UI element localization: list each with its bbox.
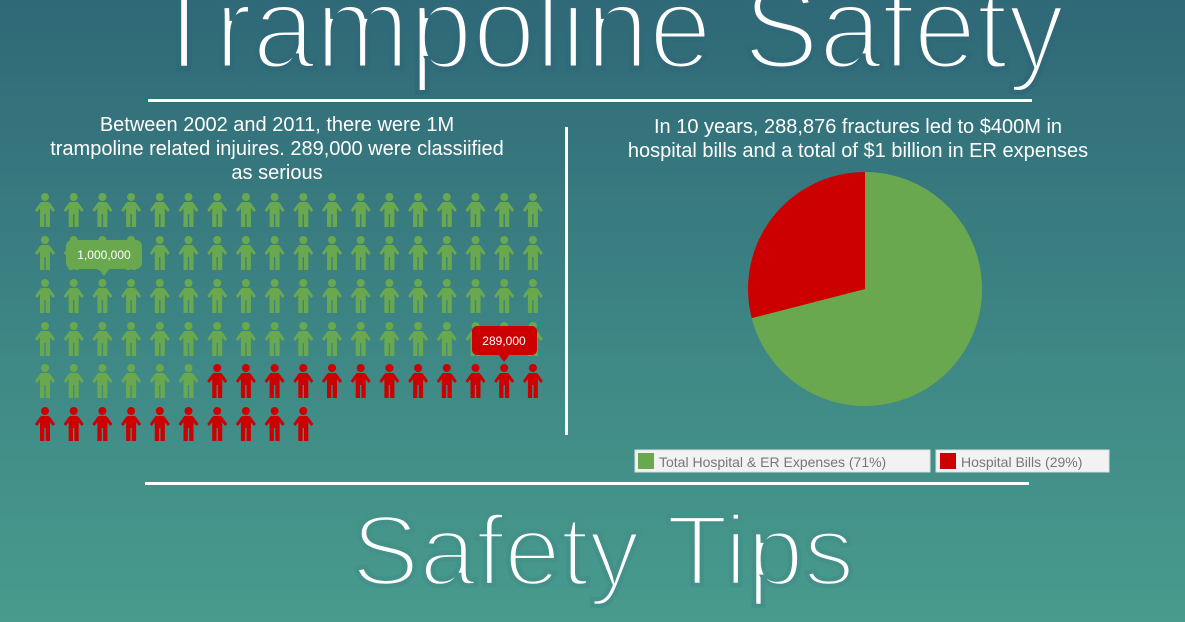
- legend: Hospital Bills (29%): [961, 454, 1082, 470]
- callout: 1,000,000: 1,000,000: [77, 248, 131, 262]
- text block: injuries: Between 2002 and 2011, there were 1M: [100, 114, 454, 136]
- text block: injuries: as serious: [231, 162, 323, 184]
- callout: 289,000: 289,000: [482, 334, 526, 348]
- pictogram grid: [35, 193, 543, 441]
- text block: fractures: In 10 years, 288,876 fractures led to $400M in: [654, 116, 1062, 138]
- callout: 289,000: [472, 326, 537, 362]
- legend: [635, 450, 1109, 472]
- pie chart: [748, 172, 982, 406]
- heading: Safety Tips: Safety Tips: [352, 495, 854, 607]
- callout: 1,000,000: [66, 240, 142, 276]
- text block: fractures: hospital bills and a total of $1 billion in ER expenses: [628, 140, 1088, 162]
- text block: injuries: trampoline related injuires. 289,000 were classiified: [50, 138, 504, 160]
- legend: Total Hospital & ER Expenses (71%): [659, 454, 886, 470]
